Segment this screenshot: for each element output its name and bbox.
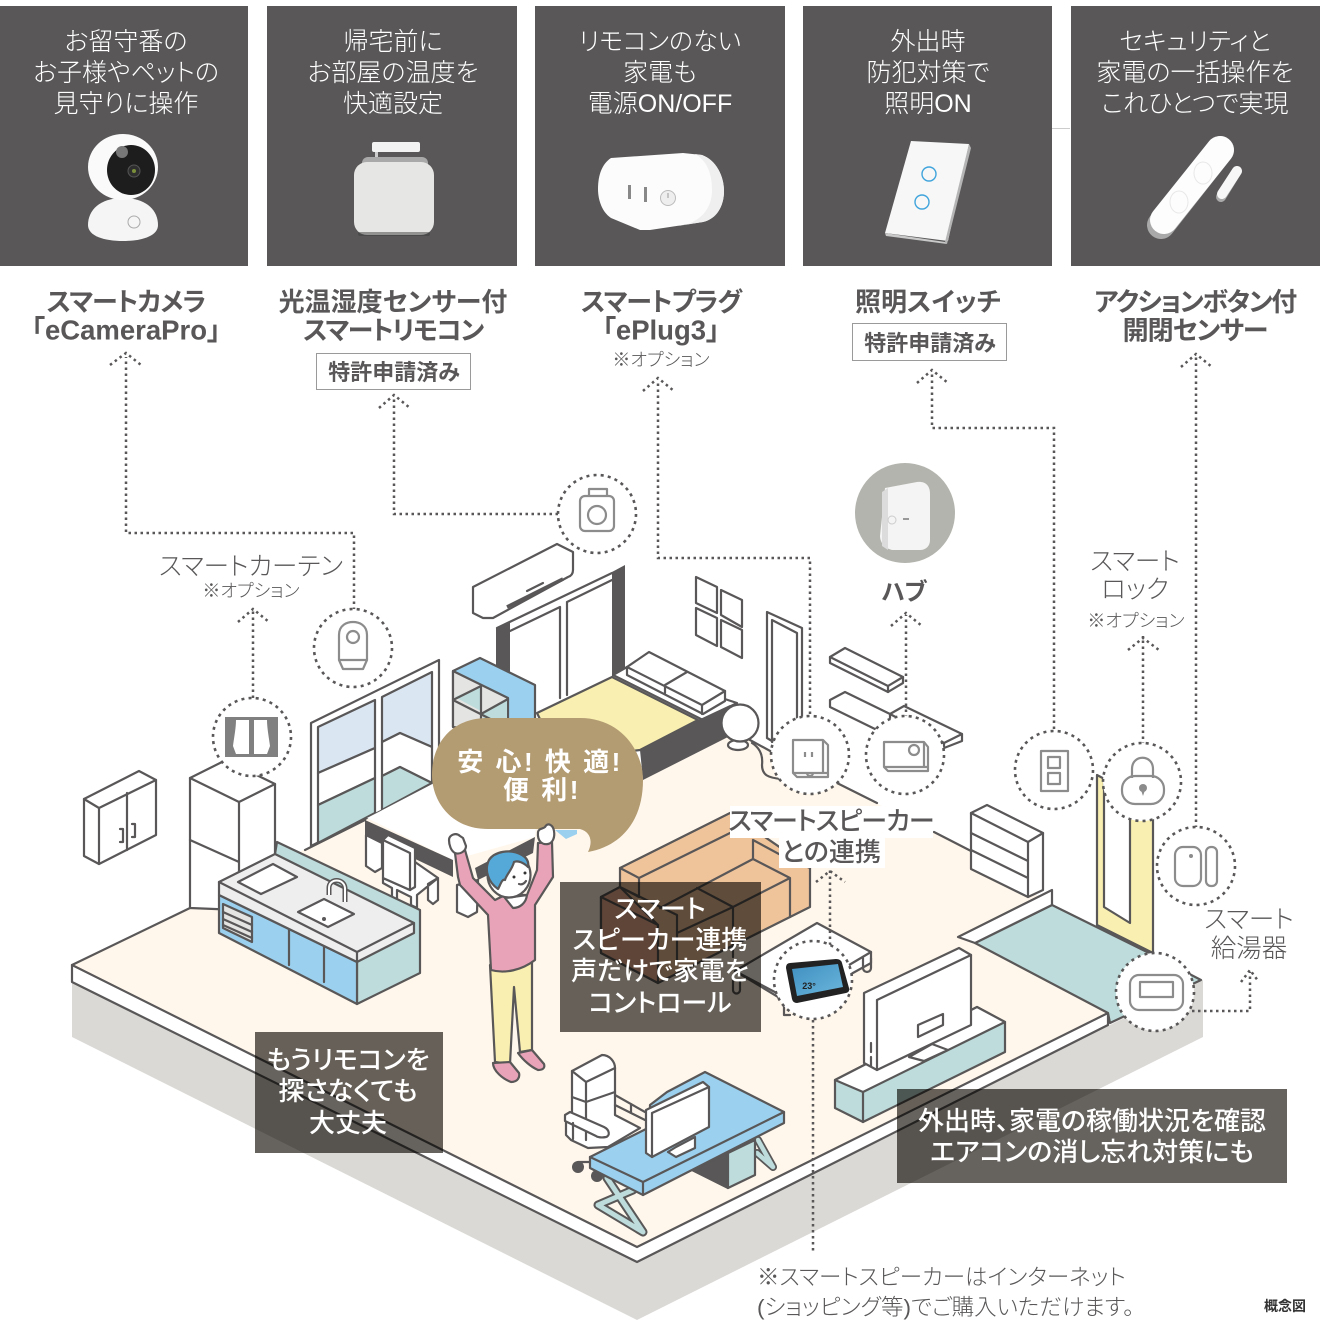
icon circle: camera — [314, 609, 392, 687]
product name: light switch: 照明スイッチ — [855, 287, 1001, 317]
heading: plug use case: 家電も — [623, 59, 697, 87]
TV set — [835, 948, 1005, 1122]
hand left — [449, 834, 466, 854]
hub photo — [855, 463, 955, 563]
heading: camera use case: お留守番の — [64, 28, 188, 56]
label: smart lock: ロック — [1101, 576, 1169, 604]
icon circle: plug — [771, 716, 849, 794]
raised right hand over bubble — [538, 824, 554, 844]
heading: remote use case: 帰宅前に — [343, 28, 443, 56]
icon: open-close sensor — [1161, 150, 1237, 225]
product name: smart plug: スマートプラグ — [581, 287, 743, 317]
floor shadow — [72, 980, 1203, 1320]
label: speaker link — [728, 806, 934, 868]
monitor — [646, 1082, 709, 1157]
entrance step — [958, 890, 1052, 943]
icon circle: curtain — [213, 698, 291, 776]
icon circle: smart speaker — [774, 941, 852, 1019]
label: hub: ハブ — [881, 578, 928, 606]
desk legs — [598, 1140, 773, 1232]
small windows — [696, 577, 742, 658]
badge: patent pending remote: 特許申請済み — [328, 360, 460, 385]
label: speaker link: スマートスピーカー — [728, 806, 934, 836]
heading: remote use case: お部屋の温度を — [307, 59, 479, 87]
open shelf — [453, 658, 577, 839]
heading: switch use case: 防犯対策で — [866, 59, 990, 87]
panel: remote header — [267, 6, 517, 266]
label: smart curtain — [159, 553, 343, 601]
fridge — [190, 760, 275, 910]
heading: remote use case: 快適設定 — [343, 90, 443, 118]
dining chair — [383, 835, 438, 908]
note: plug option: ※オプション — [612, 350, 710, 370]
label: smart lock — [1087, 548, 1185, 631]
sofa left cushion — [601, 887, 658, 983]
chest of drawers — [971, 805, 1043, 897]
callout: check when away: 外出時、家電の稼働状況を確認 — [918, 1106, 1266, 1136]
heading: camera use case: 見守りに操作 — [54, 90, 198, 118]
callout: voice control: スピーカー連携 — [573, 925, 747, 955]
badge: patent pending switch — [852, 324, 1006, 360]
product name: action button sensor: アクションボタン付 — [1094, 287, 1297, 317]
label: speaker link: との連携 — [781, 837, 881, 867]
heading: sensor use case: 家電の一括操作を — [1096, 59, 1294, 87]
icon circle: light switch — [1015, 731, 1093, 809]
badge: patent pending switch: 特許申請済み — [864, 331, 996, 356]
callout: check when away — [897, 1089, 1287, 1183]
bed front mattress — [367, 780, 540, 860]
shoes — [493, 1062, 519, 1082]
icon circle: remote — [558, 475, 636, 553]
kitchen island — [219, 842, 420, 1004]
callout: check when away: エアコンの消し忘れ対策にも — [930, 1137, 1254, 1167]
callout: voice control: スマート — [614, 894, 706, 924]
heading: sensor use case: これひとつで実現 — [1101, 90, 1289, 118]
product name: smart remote: 光温湿度センサー付 — [279, 287, 507, 317]
heading: switch use case: 照明ON — [884, 90, 972, 118]
label: smart lock: ※オプション — [1087, 611, 1185, 631]
heading: camera use case: お子様やペットの — [33, 59, 219, 87]
chair — [565, 1055, 645, 1182]
badge: patent pending remote — [316, 354, 470, 390]
floor — [72, 737, 1108, 1247]
speech bubble text: 便 利! — [503, 775, 581, 805]
callout: voice control — [560, 882, 761, 1032]
icon: smart plug — [598, 153, 724, 230]
heading: plug use case: 電源ON/OFF — [588, 90, 732, 118]
front door — [1097, 775, 1153, 953]
panel: sensor header — [1071, 6, 1320, 266]
collar — [505, 895, 527, 908]
pillows — [627, 652, 725, 714]
label: smart water heater: 給湯器 — [1211, 935, 1287, 963]
icon circle: hub — [866, 716, 944, 794]
callout: no more remote searching — [255, 1032, 443, 1153]
panel: camera header — [0, 6, 248, 266]
speech bubble — [432, 718, 643, 852]
product name: smart camera: 「eCameraPro」 — [31, 314, 221, 346]
callout: voice control: 声だけで家電を — [571, 956, 749, 986]
person — [449, 834, 553, 1082]
icon: light switch — [885, 141, 971, 244]
icon circle: lock — [1103, 743, 1181, 821]
bedroom door — [767, 612, 802, 752]
label: smart curtain: ※オプション — [202, 581, 300, 601]
heading: plug use case: リモコンのない — [579, 28, 741, 56]
icon circle: water heater controller — [1116, 953, 1194, 1031]
heading: switch use case: 外出時 — [890, 28, 966, 56]
glazed door behind bed — [496, 565, 625, 720]
entrance tile — [975, 905, 1201, 1023]
legs — [490, 958, 532, 1064]
room base — [72, 737, 1203, 1320]
icon: smart camera — [88, 134, 158, 241]
wall cabinet — [84, 771, 156, 864]
panel: switch header — [803, 6, 1052, 266]
torso and arms — [455, 842, 553, 972]
callout: no more remote searching: 探さなくても — [278, 1076, 418, 1106]
label: smart curtain: スマートカーテン — [159, 553, 343, 581]
floor lamp — [722, 704, 782, 779]
label: smart lock: スマート — [1090, 548, 1180, 576]
balcony window — [311, 660, 439, 846]
concept note: 概念図 — [1264, 1298, 1306, 1314]
desk top — [590, 1072, 784, 1195]
product name: smart remote: スマートリモコン — [303, 316, 484, 346]
footnote: (ショッピング等)でご購入いただけます。 — [757, 1295, 1134, 1320]
connector strip — [1052, 128, 1070, 129]
product name: smart camera: スマートカメラ — [47, 287, 205, 317]
footnote: ※スマートスピーカーはインターネット — [757, 1265, 1126, 1290]
callout: voice control: コントロール — [588, 988, 732, 1018]
floor rim — [72, 965, 1108, 1262]
dotted connectors — [110, 353, 1259, 1252]
icon circle: door sensor — [1157, 827, 1235, 905]
desk — [565, 1055, 784, 1232]
callout: no more remote searching: もうリモコンを — [266, 1045, 430, 1075]
callout: no more remote searching: 大丈夫 — [309, 1108, 387, 1138]
head — [488, 852, 530, 898]
label: smart water heater: スマート — [1204, 906, 1294, 934]
icon circle: smart speaker: 23° — [802, 981, 816, 991]
bed — [365, 652, 745, 917]
product name: action button sensor: 開閉センサー — [1123, 316, 1267, 346]
speech bubble text: 安 心! 快 適! — [457, 747, 623, 777]
wall shelves — [830, 648, 962, 748]
heading: sensor use case: セキュリティと — [1119, 28, 1271, 56]
product name: smart plug: 「ePlug3」 — [602, 314, 720, 346]
air conditioner — [473, 544, 573, 618]
sofa — [601, 813, 810, 983]
coffee table — [733, 923, 871, 1015]
icon: smart remote — [354, 142, 434, 236]
panel: plug header — [535, 6, 785, 266]
